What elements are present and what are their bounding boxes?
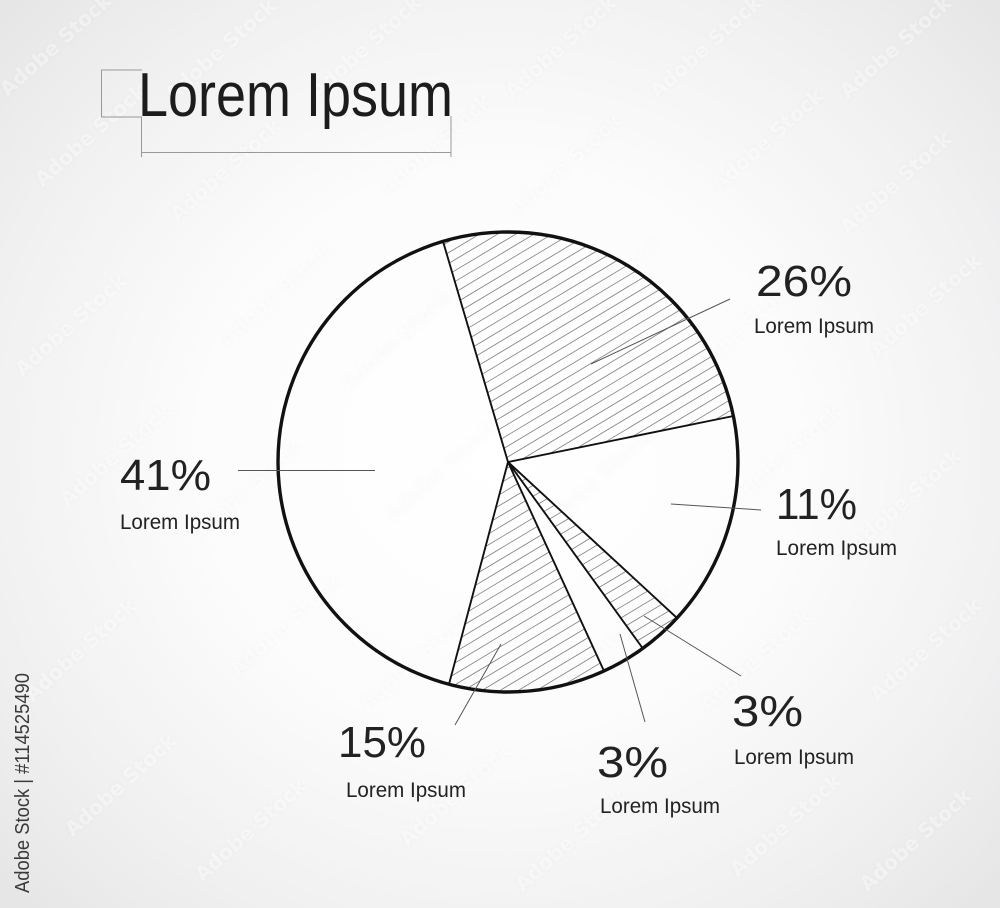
watermark pattern: Adobe Stock <box>725 768 846 881</box>
label: 3% right: 3% <box>732 687 803 736</box>
watermark pattern: Adobe Stock <box>190 773 311 886</box>
pie chart <box>276 230 740 694</box>
label: 3% right: Lorem Ipsum <box>734 746 854 769</box>
watermark pattern: Adobe Stock <box>10 268 131 381</box>
watermark pattern: Adobe Stock <box>680 273 801 386</box>
label: 11%: Lorem Ipsum <box>776 537 897 560</box>
watermark pattern: Adobe Stock <box>355 603 476 716</box>
watermark pattern: Adobe Stock <box>510 783 631 896</box>
watermark pattern: Adobe Stock <box>185 433 306 546</box>
watermark pattern: Adobe Stock <box>865 248 986 361</box>
watermark pattern: Adobe Stock <box>855 783 976 896</box>
watermark pattern: Adobe Stock <box>845 443 966 556</box>
watermark pattern: Adobe Stock <box>30 78 151 191</box>
watermark pattern: Adobe Stock <box>380 413 501 526</box>
watermark pattern: Adobe Stock <box>725 398 846 511</box>
label: 26% <box>754 257 874 338</box>
label: 3% left: Lorem Ipsum <box>600 795 720 818</box>
hatching on 26%, 15% and 3% slices <box>444 234 730 690</box>
slice divider lines <box>443 241 734 684</box>
label: 3% left: 3% <box>597 738 668 787</box>
watermark pattern: Adobe Stock <box>695 603 816 716</box>
label: 15%: Lorem Ipsum <box>346 779 466 802</box>
label: 41% <box>120 451 240 534</box>
watermark pattern: Adobe Stock <box>707 83 828 196</box>
pie outline <box>278 232 738 692</box>
watermark pattern: Adobe Stock <box>55 398 176 511</box>
label: 11%: 11% <box>776 480 857 529</box>
label: 26%: Lorem Ipsum <box>754 315 874 338</box>
watermark pattern: Adobe Stock <box>375 88 496 201</box>
label: 15% <box>338 718 466 802</box>
watermark pattern: Adobe Stock <box>535 423 656 536</box>
watermark pattern: Adobe Stock <box>20 593 141 706</box>
watermark pattern: Adobe Stock <box>215 238 336 351</box>
label: 3% left <box>597 738 720 818</box>
label: 15%: 15% <box>338 718 426 767</box>
watermark pattern: Adobe Stock <box>60 728 181 841</box>
title dimension lines <box>101 70 451 157</box>
label: 3% right <box>732 687 854 769</box>
watermark pattern: Adobe Stock <box>225 568 346 681</box>
watermark pattern: Adobe Stock <box>395 738 516 851</box>
leader lines <box>238 299 761 725</box>
watermark pattern: Adobe Stock <box>505 108 626 221</box>
label: 11% <box>776 480 897 560</box>
stock id side text: Adobe Stock | #114525490 <box>12 673 34 893</box>
title with dimension lines <box>101 61 453 157</box>
watermark pattern: Adobe Stock <box>865 593 986 706</box>
watermark pattern: Adobe Stock <box>165 113 286 226</box>
watermark pattern: Adobe Stock <box>545 228 666 341</box>
watermark pattern: Adobe Stock <box>335 283 456 396</box>
label: 41%: Lorem Ipsum <box>120 511 240 534</box>
title text: Lorem Ipsum <box>138 61 453 130</box>
watermark pattern: Adobe Stock <box>835 126 956 239</box>
label: 26%: 26% <box>756 257 852 306</box>
watermark pattern: Adobe Stock <box>555 578 676 691</box>
label: 41%: 41% <box>120 451 211 500</box>
